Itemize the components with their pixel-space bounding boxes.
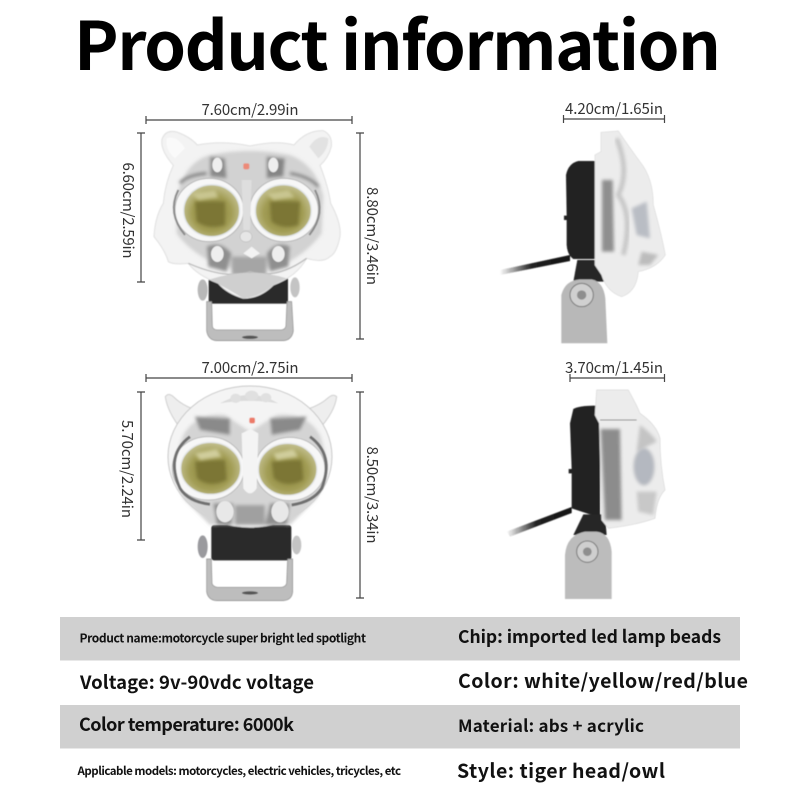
left height dimension [117,392,145,540]
left height dimension: 5.70cm/2.24in [117,420,138,518]
applicable models: Applicable models: motorcycles, electric vehicles, tricycles, etc [76,763,401,779]
nose bridge [242,180,252,230]
panel: owl lamp front view [117,357,383,601]
color: Color: white/yellow/red/blue [458,665,748,694]
cable [500,255,570,275]
right height dimension: 8.50cm/3.34in [362,446,383,544]
black mount [211,525,291,560]
face shading [177,151,323,275]
face shading [177,415,325,525]
icon: owl lamp side [507,390,665,599]
beak [242,429,258,493]
left eye [175,178,244,242]
panel: specification table [60,617,748,784]
left height dimension: 6.60cm/2.59in [118,162,139,258]
clear lens body [595,131,665,297]
mount arm [573,514,607,535]
product name: Product name:motorcycle super bright led spotlight [80,630,366,646]
side bracket [565,532,612,599]
right eye [250,178,318,242]
color temperature: Color temperature: 6000k [79,711,294,737]
right height dimension [356,133,383,339]
silver U bracket [207,302,293,341]
chip: Chip: imported led lamp beads [458,624,721,649]
panel: tiger head lamp front view [118,99,383,341]
clear lens body [595,390,665,528]
cable [507,507,572,537]
grey band row 1 [60,617,740,660]
ears inner [166,138,185,158]
side bracket [561,279,607,343]
grey band row 3 [60,705,740,748]
black mount [209,278,288,304]
voltage: Voltage: 9v-90vdc voltage [79,669,314,695]
width dimension [146,357,352,382]
width dimension [146,99,352,124]
right height dimension: 8.80cm/3.46in [362,187,383,285]
depth dimension: 3.70cm/1.45in [565,357,663,378]
icon: tiger lamp side [500,131,665,343]
material: Material: abs + acrylic [458,712,644,737]
silver U bracket [207,559,293,601]
style: Style: tiger head/owl [457,755,665,784]
housing [168,386,332,527]
panel: tiger head lamp side view [500,98,665,343]
icon: tiger lamp [154,131,340,341]
right height dimension [356,392,383,598]
depth dimension: 4.20cm/1.65in [565,98,663,119]
right eye [255,437,325,501]
panel: owl lamp side view [507,357,665,599]
left eye [172,437,244,500]
housing [154,131,340,298]
horns [165,394,205,430]
width dimension: 7.60cm/2.99in [202,99,298,120]
rear housing [569,406,600,515]
icon: owl lamp [165,386,337,601]
width dimension: 7.00cm/2.75in [202,357,298,378]
mount arm [573,260,605,282]
left height dimension [118,133,145,282]
rear housing [564,161,597,259]
